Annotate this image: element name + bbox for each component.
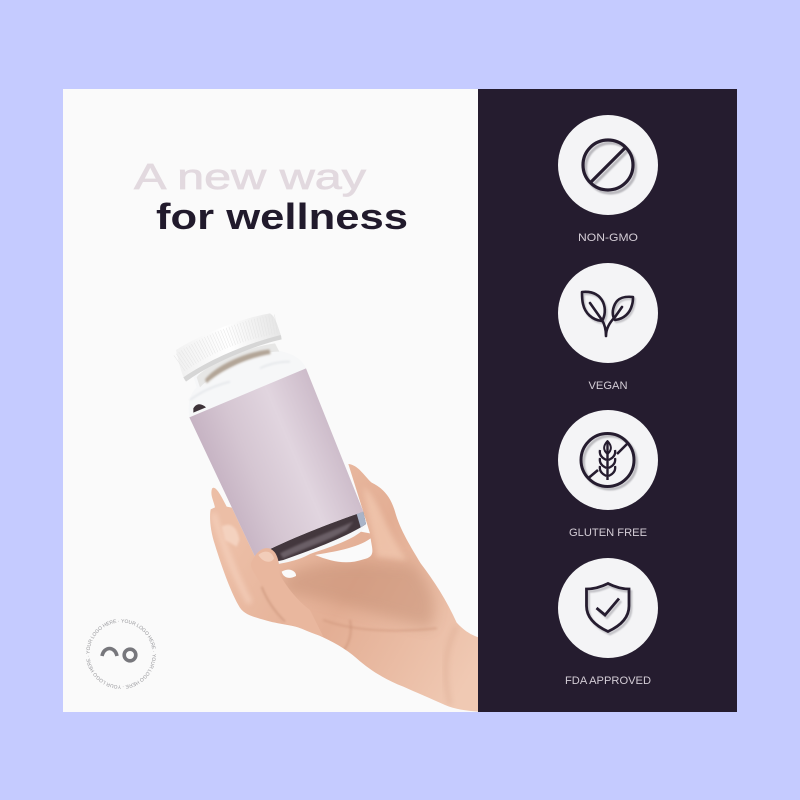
hand palm [210,464,478,712]
heading [134,156,408,237]
icon: gluten free [558,410,658,510]
blank label [189,368,363,557]
icon: non-GMO [558,115,658,215]
bottle [176,313,366,567]
panel: product [63,89,478,712]
glass body [189,343,366,565]
benefit: vegan [558,263,658,392]
icon: FDA approved [558,558,658,658]
benefit: FDA approved [558,558,658,687]
label: VEGAN [588,380,628,392]
logo mark [102,648,117,656]
label: GLUTEN FREE [569,527,647,539]
heading: for wellness [156,196,408,237]
benefit: non-GMO [558,115,658,244]
logo badge [86,619,156,689]
gap between bottle and palm [282,538,372,578]
panel: benefits [478,89,737,712]
benefit: gluten free [558,410,658,539]
label: FDA APPROVED [565,675,651,687]
index finger over bottle [251,548,323,637]
photo: hand holding bottle [176,313,487,717]
icon: vegan [558,263,658,363]
contents [253,512,366,567]
cap [176,313,282,381]
circular logo text: YOUR LOGO HERE · YOUR LOGO HERE · YOUR LOGO HERE · YOUR LOGO HERE · [86,619,156,689]
label: NON-GMO [578,232,638,244]
neck [197,343,279,387]
heading: A new way [134,156,366,197]
